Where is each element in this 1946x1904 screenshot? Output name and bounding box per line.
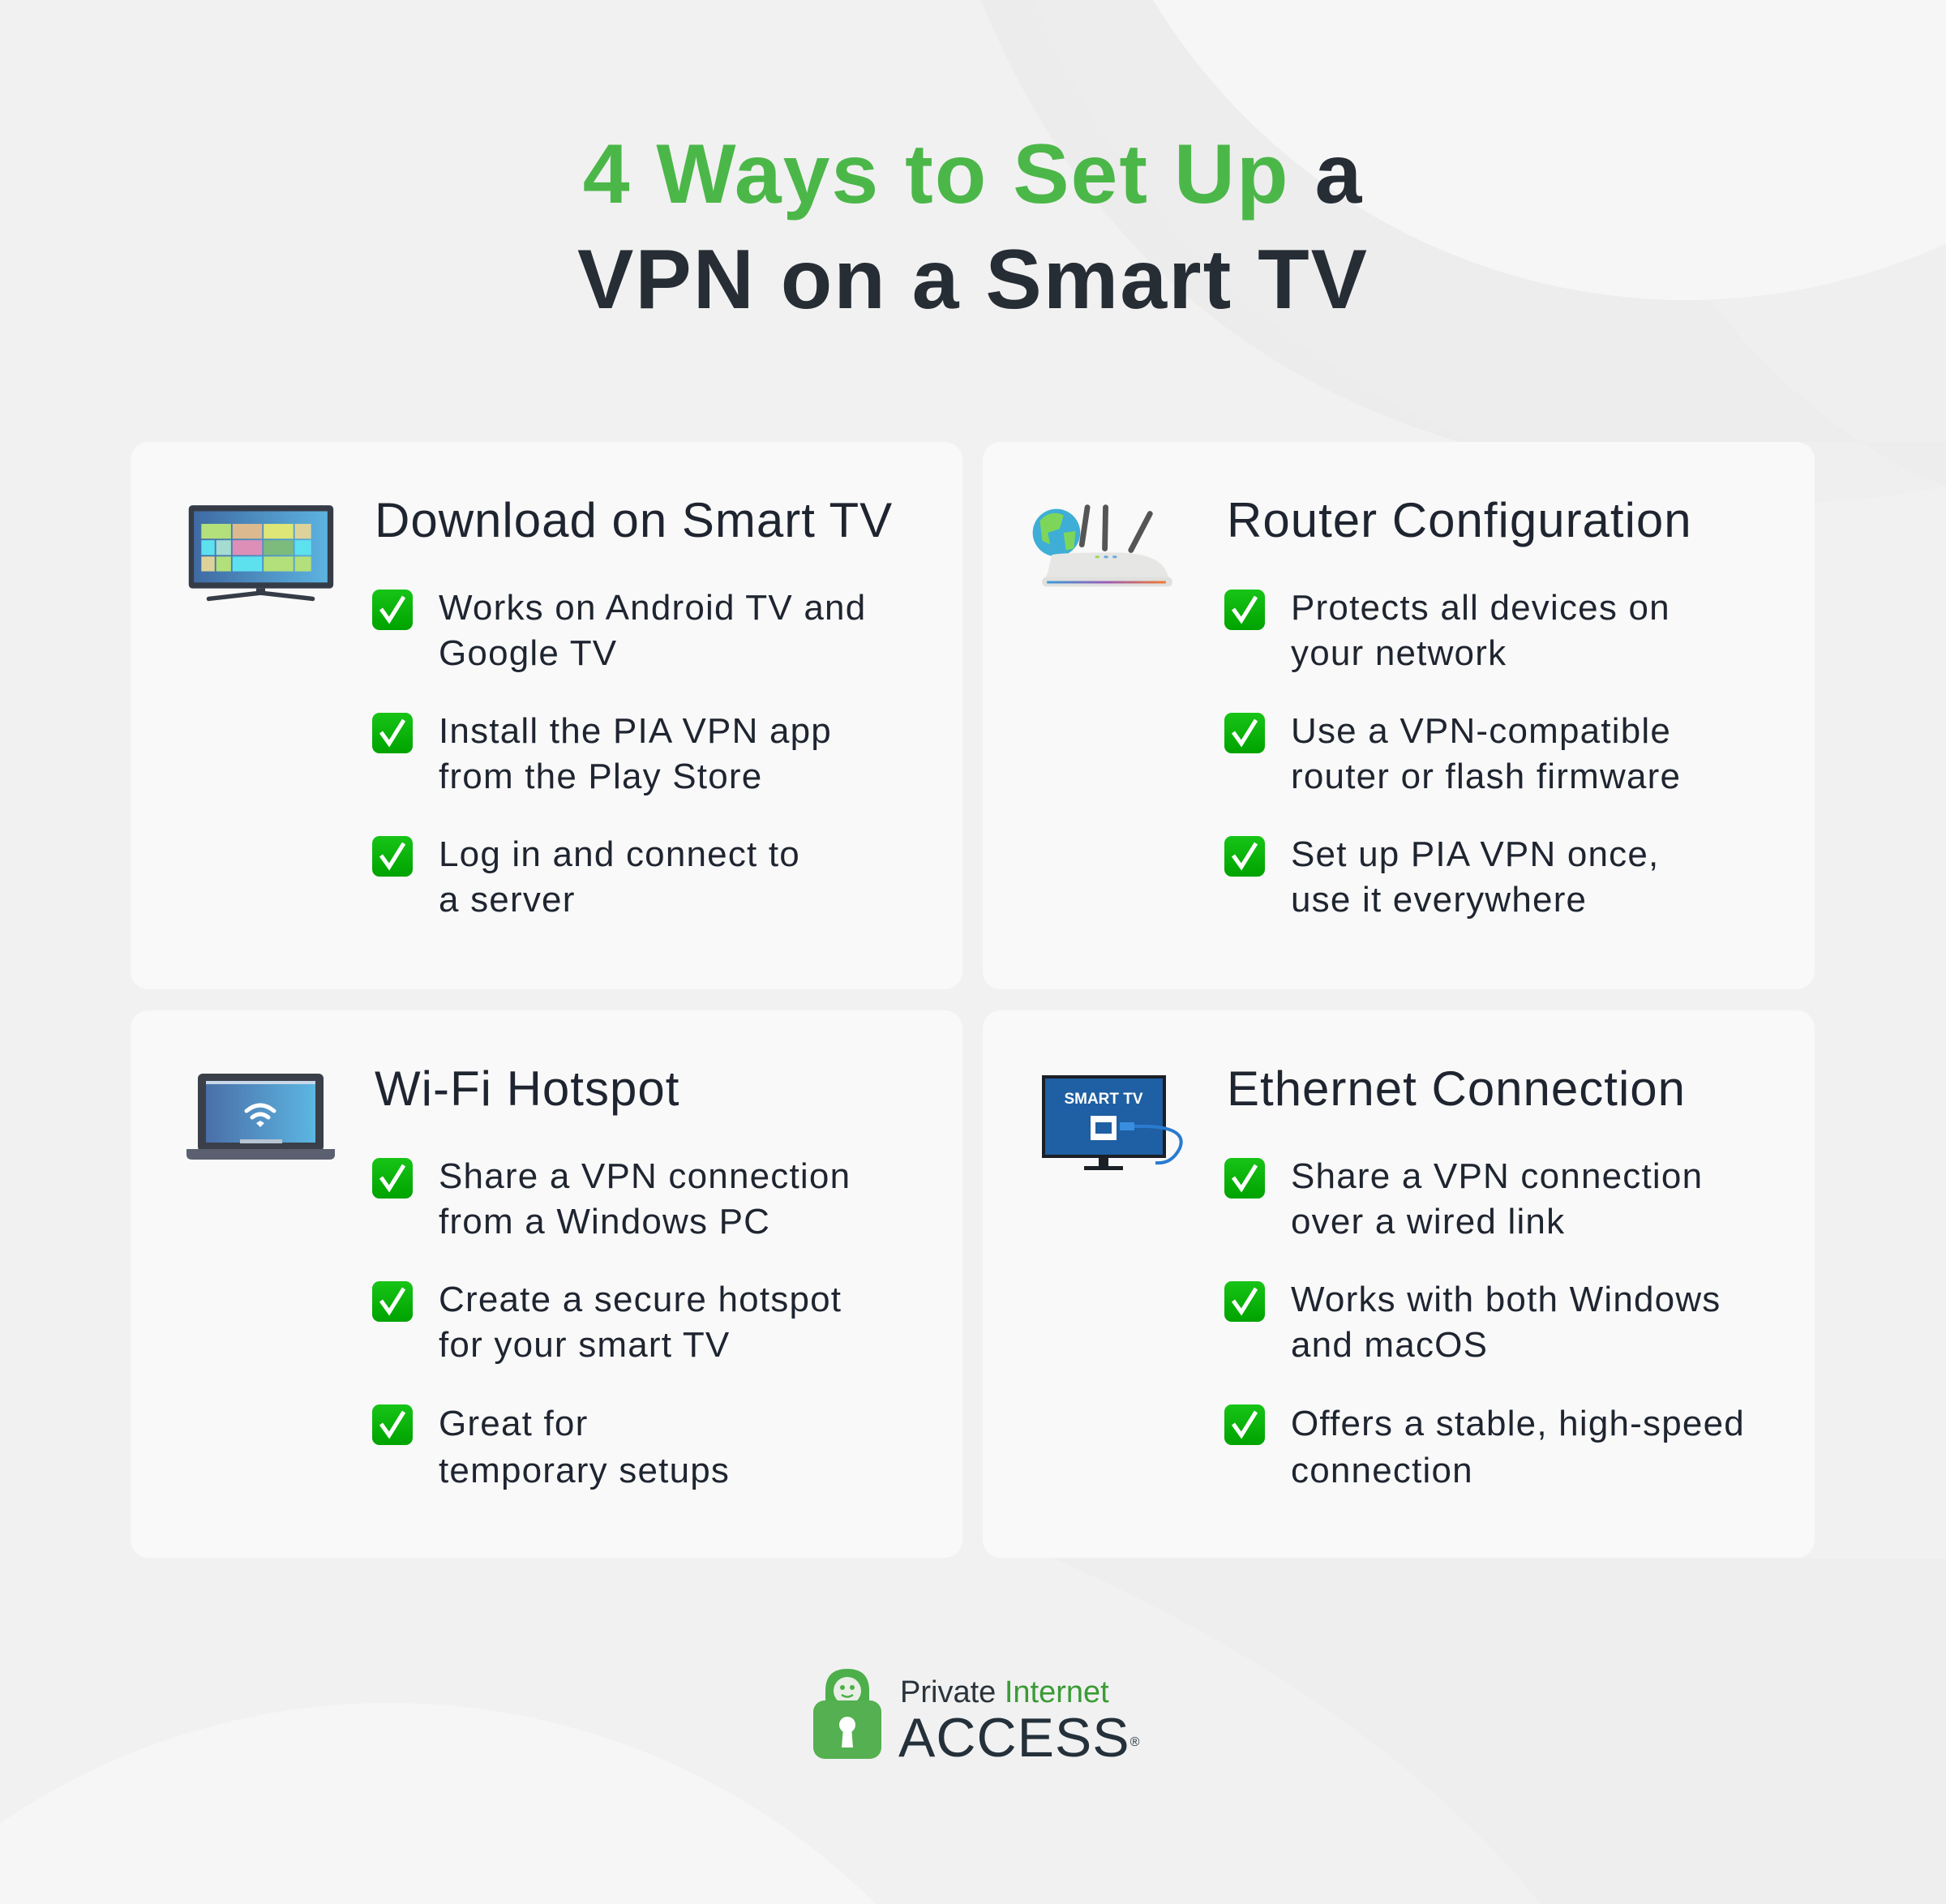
- bullet 3: Set up PIA VPN once,: [1291, 834, 1659, 874]
- heading: Router Configuration: [1227, 493, 1692, 547]
- bullet 1: [372, 1156, 851, 1241]
- icon: padlock: [813, 1669, 881, 1759]
- bullet 2: [1224, 711, 1681, 796]
- bullet 3: temporary setups: [439, 1451, 730, 1490]
- bullet 1: Works on Android TV and: [439, 588, 866, 628]
- bullet 3: Great for: [439, 1404, 588, 1443]
- bullet 2: and macOS: [1291, 1325, 1488, 1365]
- bullet 1: Protects all devices on: [1291, 588, 1670, 628]
- bullet 2: [372, 1280, 842, 1365]
- bullet 1: Share a VPN connection: [439, 1156, 851, 1196]
- bullet 1: Share a VPN connection: [1291, 1156, 1703, 1196]
- icon: router: [1033, 504, 1172, 587]
- logo text: Private Internet: [900, 1675, 1109, 1709]
- bullet 3: a server: [439, 880, 576, 920]
- bullet 3: [372, 1404, 730, 1490]
- bullet 1: your network: [1291, 633, 1507, 673]
- bullet 2: [372, 711, 832, 796]
- bullet 2: Install the PIA VPN app: [439, 711, 832, 751]
- title: [577, 127, 1369, 327]
- icon: laptop: [186, 1074, 335, 1160]
- panel: wi-fi hotspot: [131, 1010, 962, 1558]
- bullet 2: router or flash firmware: [1291, 757, 1681, 796]
- bullet 2: Works with both Windows: [1291, 1280, 1721, 1319]
- panel: download on smart tv: [131, 442, 962, 989]
- bullet 1: Google TV: [439, 633, 617, 673]
- bullet 2: for your smart TV: [439, 1325, 730, 1365]
- bullet 1: [1224, 588, 1670, 673]
- bullet 3: Log in and connect to: [439, 834, 800, 874]
- bullet 3: connection: [1291, 1451, 1473, 1490]
- bullet 3: [1224, 1404, 1745, 1490]
- title: 4 Ways to Set Up a: [583, 127, 1363, 221]
- icon: smart tv: [188, 505, 334, 602]
- heading: Download on Smart TV: [375, 493, 893, 547]
- bullet 3: Offers a stable, high-speed: [1291, 1404, 1745, 1443]
- bullet 2: [1224, 1280, 1721, 1365]
- bullet 2: Use a VPN-compatible: [1291, 711, 1671, 751]
- bullet 2: Create a secure hotspot: [439, 1280, 842, 1319]
- panel: ethernet connection: [983, 1010, 1815, 1558]
- panel: router configuration: [983, 442, 1815, 989]
- heading: Ethernet Connection: [1227, 1061, 1686, 1116]
- logo: [813, 1669, 1140, 1769]
- title: VPN on a Smart TV: [577, 233, 1369, 327]
- icon: smart tv with ethernet: [1042, 1075, 1183, 1170]
- heading: Wi-Fi Hotspot: [375, 1061, 679, 1116]
- bullet 3: [1224, 834, 1659, 920]
- bullet 1: [372, 588, 866, 673]
- bullet 2: from the Play Store: [439, 757, 762, 796]
- bullet 3: [372, 834, 800, 920]
- bullet 1: [1224, 1156, 1703, 1241]
- icon: smart tv with ethernet: SMART TV: [1064, 1091, 1143, 1108]
- bullet 3: use it everywhere: [1291, 880, 1587, 920]
- bullet 1: over a wired link: [1291, 1202, 1565, 1241]
- bullet 1: from a Windows PC: [439, 1202, 770, 1241]
- logo: ACCESS®: [898, 1707, 1140, 1769]
